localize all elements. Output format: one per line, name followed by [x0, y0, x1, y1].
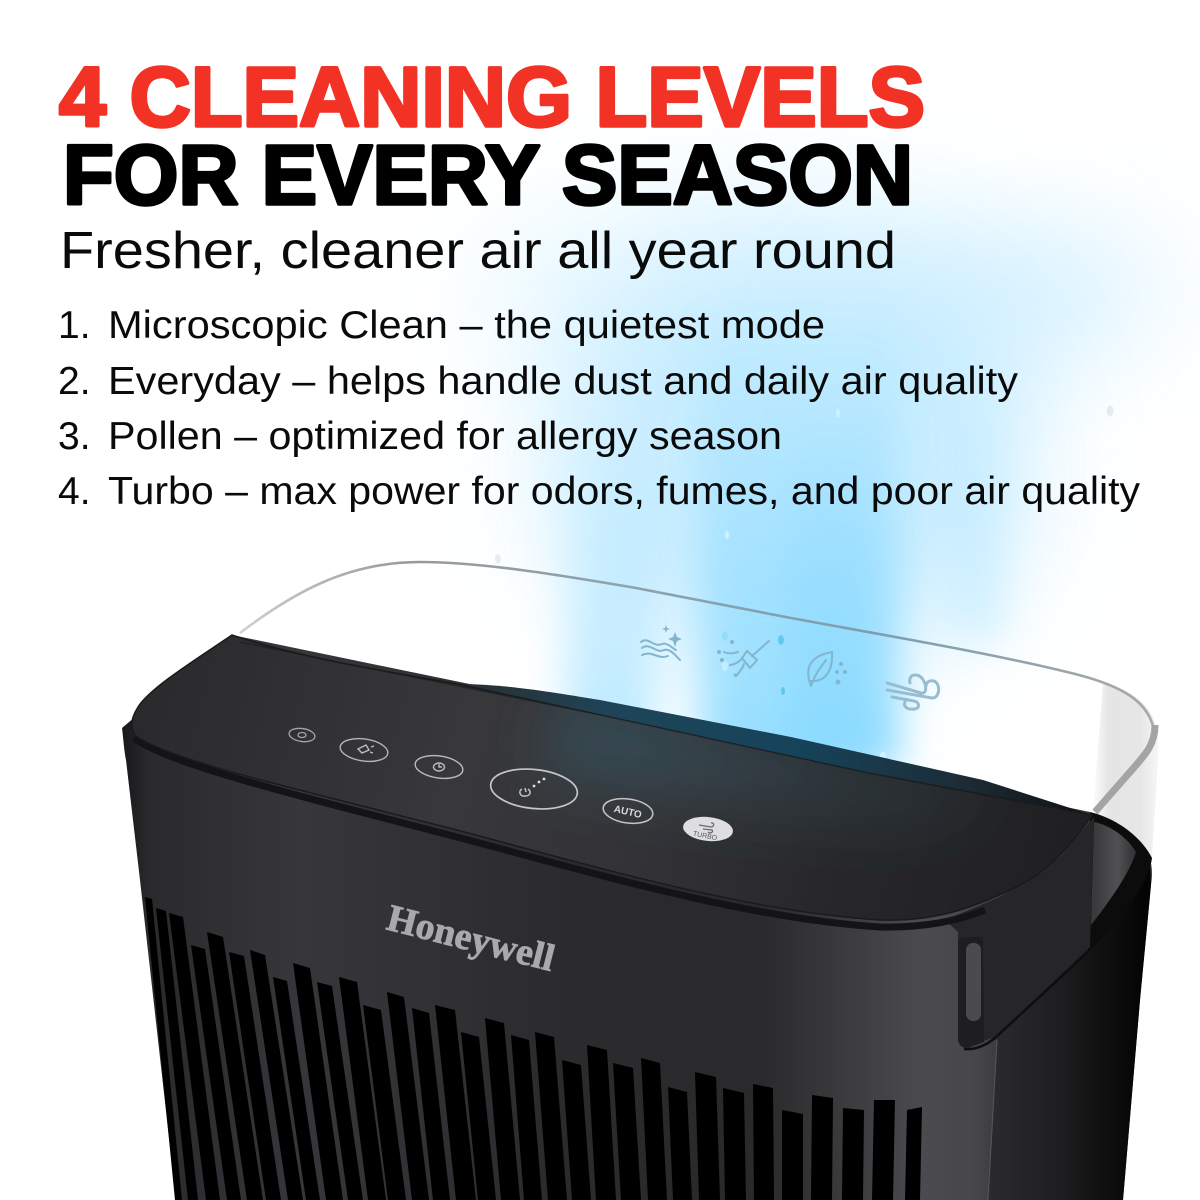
- cleaning level list: [58, 304, 1141, 513]
- vent slots: [145, 897, 922, 1200]
- blue clean-air glow: [480, 185, 1184, 770]
- rear filter window: [1091, 822, 1136, 925]
- floating air particles: [495, 332, 1114, 763]
- Honeywell logo: Honeywell: [383, 897, 559, 980]
- control panel surface: [132, 635, 1092, 920]
- title line 2: FOR EVERY SEASON: [63, 128, 913, 222]
- button: timer: [414, 753, 464, 781]
- level 1: 1.: [58, 304, 91, 347]
- button: power and fan speed: [489, 765, 579, 813]
- corner panel around handle: [945, 817, 1094, 1048]
- icon: microscopic clean sparkle: [641, 625, 682, 660]
- blue light reflection on panel: [240, 642, 945, 821]
- rear rim behind control panel: [457, 684, 1092, 815]
- air purifier device: [122, 635, 1152, 1200]
- button: turbo: TURBO: [692, 831, 718, 842]
- glass inner edge: [1095, 725, 1155, 812]
- level 3: 3.: [58, 415, 91, 458]
- button: auto: AUTO: [613, 804, 643, 821]
- button: auto: [602, 796, 654, 826]
- level 1: Microscopic Clean – the quietest mode: [108, 304, 825, 347]
- right end of glass: [1093, 683, 1158, 857]
- subtitle: Fresher, cleaner air all year round: [60, 222, 896, 280]
- front housing: [122, 635, 1152, 1200]
- button: turbo: [682, 814, 734, 844]
- lip of control panel: [134, 738, 985, 927]
- level 2: 2.: [58, 360, 91, 403]
- title line 1: 4 CLEANING LEVELS: [59, 50, 925, 144]
- side seam: [988, 1040, 997, 1200]
- right side housing: [988, 860, 1151, 1200]
- air mode icons: [641, 625, 939, 709]
- black ring around rear window: [1088, 812, 1152, 952]
- level 4: Turbo – max power for odors, fumes, and poor air quality: [108, 470, 1141, 513]
- level 4: 4.: [58, 470, 91, 513]
- icon: everyday broom: [717, 640, 769, 676]
- icon: turbo wind: [887, 675, 939, 709]
- icon: pollen leaf: [808, 652, 847, 686]
- handle recess: [958, 937, 984, 1048]
- level 3: Pollen – optimized for allergy season: [108, 415, 782, 458]
- glass air chamber: [240, 562, 1158, 857]
- level 2: Everyday – helps handle dust and daily air quality: [108, 360, 1019, 403]
- glass outline: [240, 562, 1154, 730]
- button: light: [339, 736, 389, 764]
- button: reset filter: [288, 727, 316, 743]
